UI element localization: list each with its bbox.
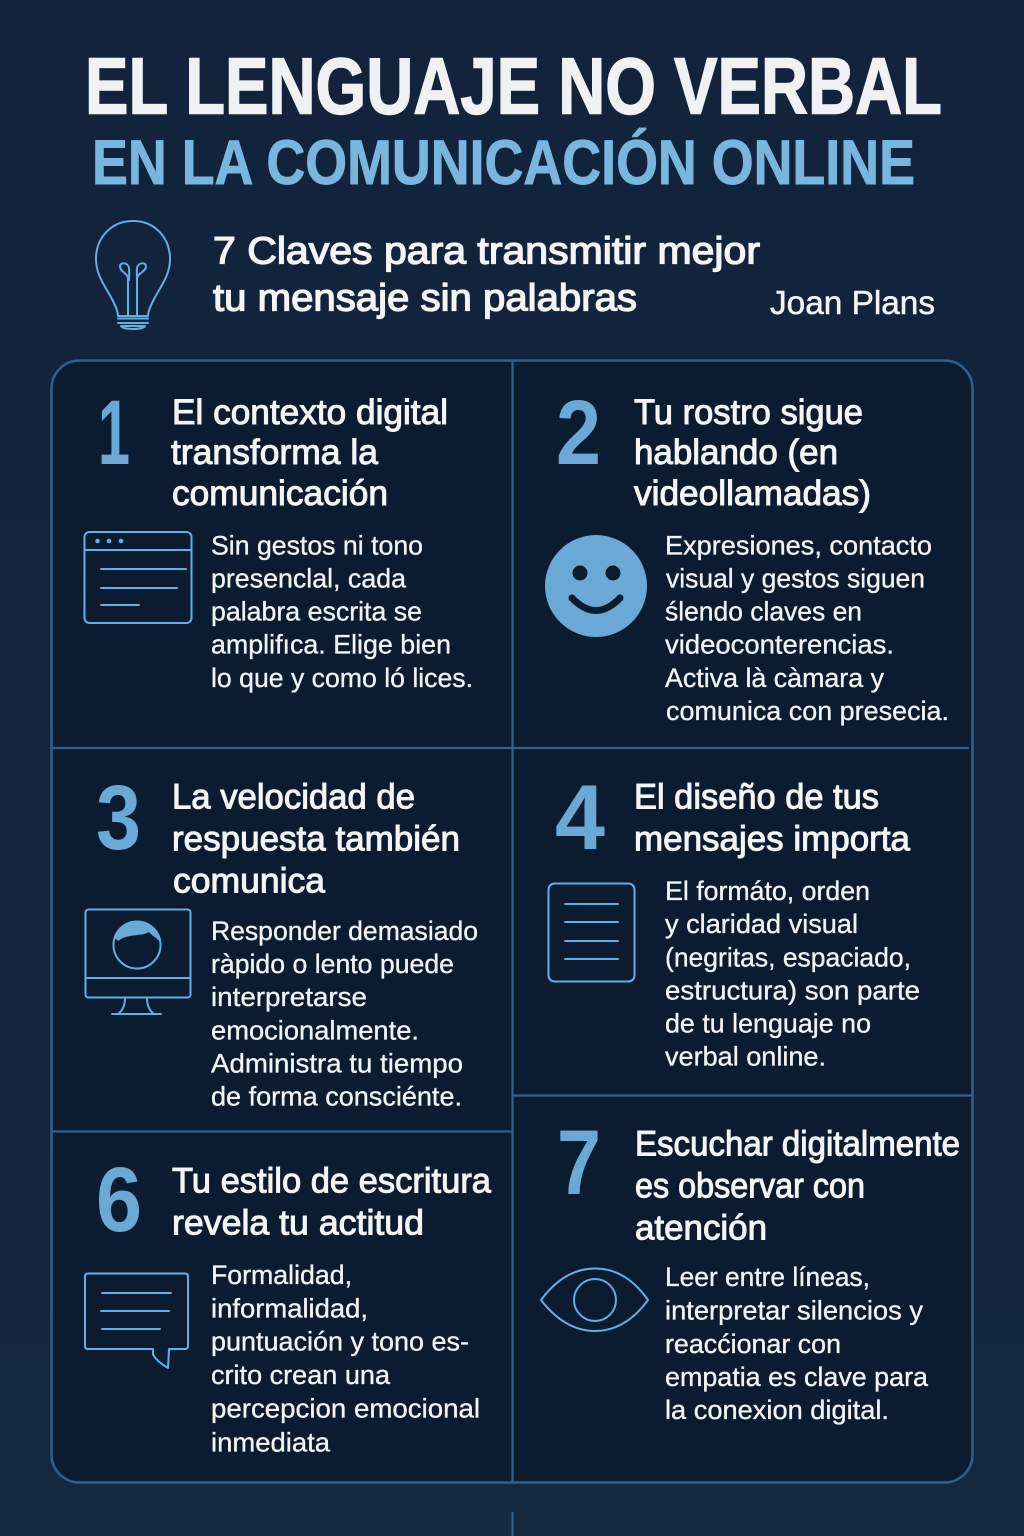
panel: key 1 [84,382,473,693]
panel: key 6 [85,1149,492,1458]
text 2: videoconterencias. [665,630,894,660]
text 4: El formáto, orden [665,876,870,906]
heading 7 [635,1124,960,1248]
heading 6 [172,1162,492,1242]
text 3: de forma consciénte. [211,1082,462,1112]
text 7: empatia es clave para [665,1362,929,1392]
panel: keys grid [52,360,972,1482]
text 2: ślendo claves en [665,596,862,626]
heading 2: hablando (en [634,433,838,472]
text 2 [665,530,949,726]
text 1: palabra escrita se [211,596,422,626]
panel: key 7 [541,1112,960,1425]
heading 4: El diseño de tus [634,778,879,816]
text 1: Sin gestos ni tono [211,530,423,560]
text 1: amplifıca. Elige bien [211,630,451,660]
text 3: interpretarse [211,982,367,1012]
heading 1: comunicación [172,474,388,513]
text 7: la conexion digital. [665,1395,889,1425]
text 1: lo que y como ló lices. [211,663,473,693]
text 4 [665,876,920,1072]
text 3: emocionalmente. [211,1016,419,1046]
number 2: 2 [556,382,601,484]
heading 2: videollamadas) [634,474,871,513]
text 6: percepcion emocional [211,1394,480,1424]
text 2: Expresiones, contacto [665,530,932,560]
author: Joan Plans [770,284,935,321]
panel: key 4 [548,767,920,1072]
text 3 [211,916,478,1112]
heading 6: revela tu actitud [172,1204,424,1242]
heading 4: mensajes importa [634,820,911,858]
text 3: Responder demasiado [211,916,478,946]
text 4: y claridad visual [665,909,858,939]
text 6 [211,1260,480,1458]
heading 3 [172,778,460,900]
text 4: estructura) son parte [665,976,920,1006]
icon: browser window [84,532,192,623]
text 7: Leer entre líneas, [665,1262,870,1292]
icon: document [548,884,634,982]
number 7: 7 [557,1112,601,1214]
icon: monitor with head [86,910,190,1014]
number 3: 3 [96,767,141,869]
text 2: comunica con presecia. [666,696,949,726]
number 1: 1 [98,382,130,484]
text 7 [665,1262,929,1425]
text 4: de tu lenguaje no [665,1008,871,1038]
text 3: ràpido o lento puede [211,949,454,979]
tagline: tu mensaje sin palabras [213,278,637,320]
panel: key 2 [545,382,949,726]
text 1 [211,530,473,693]
text 7: interpretar silencios y [665,1296,923,1326]
icon: speech bubble [85,1274,188,1368]
text 2: Activa là càmara y [665,663,884,693]
heading 4 [634,778,911,858]
number 6: 6 [96,1149,142,1251]
heading 1 [171,393,448,513]
tagline [213,230,760,320]
heading 3: respuesta también [172,820,460,858]
text 3: Administra tu tiempo [211,1048,463,1078]
icon: light bulb [96,221,170,329]
text 6: puntuación y tono es- [211,1326,469,1356]
number 4: 4 [555,767,605,869]
tagline: 7 Claves para transmitir mejor [213,230,760,272]
heading 2: Tu rostro sigue [634,393,863,432]
heading 2 [634,393,871,513]
heading 1: transforma la [171,433,379,472]
icon: eye [541,1268,648,1331]
text 7: reacćionar con [665,1329,841,1359]
panel: key 3 [86,767,478,1112]
heading 6: Tu estilo de escritura [172,1162,492,1200]
text 4: (negritas, espaciado, [665,942,911,972]
text 4: verbal online. [665,1042,826,1072]
heading 7: atención [635,1208,767,1248]
heading 3: La velocidad de [172,778,415,816]
text 6: informalidad, [211,1294,368,1324]
text 1: presenclal, cada [211,564,407,594]
text 2: visual y gestos siguen [666,564,925,594]
text 6: crito crean una [211,1360,391,1390]
text 6: inmediata [211,1428,331,1458]
heading 1: El contexto digital [172,393,448,432]
icon: smiley face [545,535,647,637]
heading 3: comunica [173,862,326,900]
text 6: Formalidad, [211,1260,352,1290]
heading 7: Escuchar digitalmente [635,1124,960,1164]
heading 7: es observar con [635,1166,865,1206]
